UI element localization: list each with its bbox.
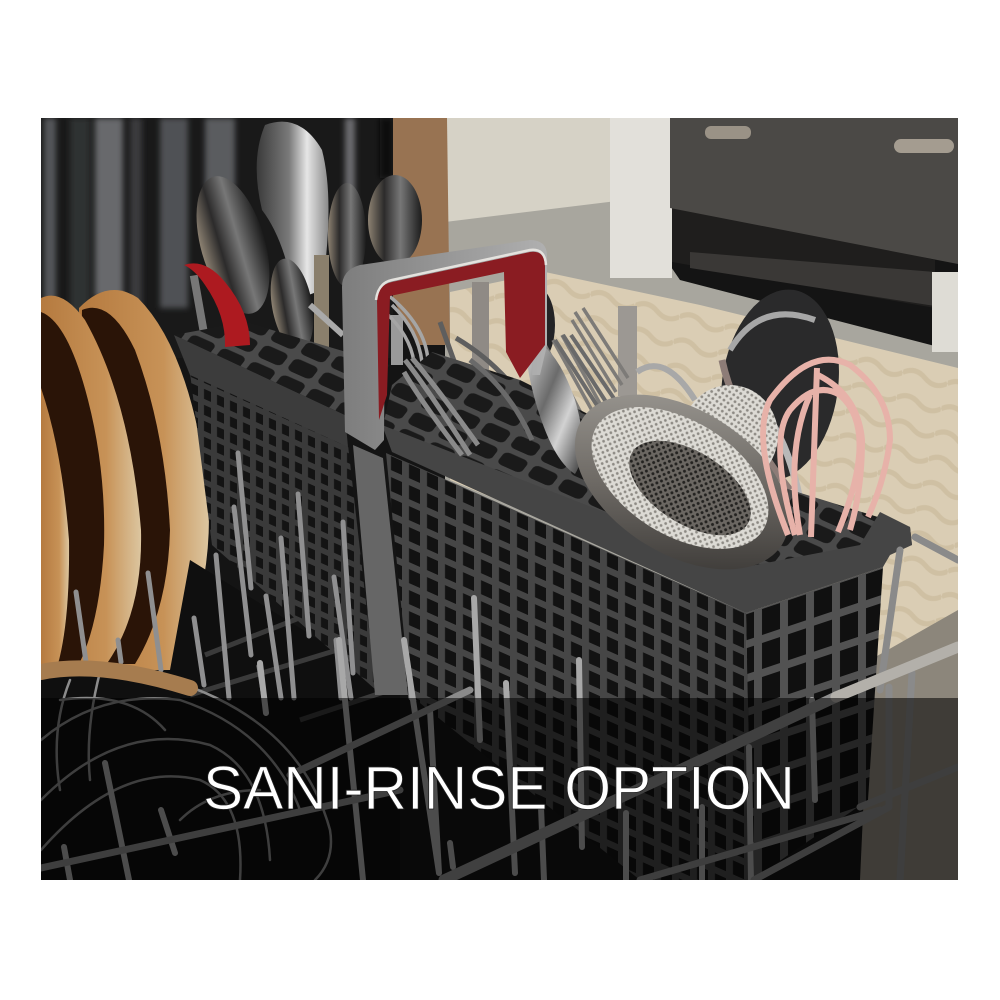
rack rods left bbox=[76, 453, 416, 698]
plate: back bbox=[79, 290, 209, 672]
strainer cup bbox=[691, 385, 778, 464]
right compartment utensils bbox=[385, 282, 851, 500]
rack rods under caption bbox=[64, 598, 815, 880]
handle frame bbox=[342, 240, 547, 450]
dishwasher interior wall bbox=[41, 118, 360, 312]
lower rack front bbox=[41, 537, 958, 880]
caption band bbox=[41, 698, 958, 880]
red utensil handle bbox=[184, 263, 250, 347]
glass bowl foot bbox=[41, 668, 190, 688]
right basket rim bbox=[382, 425, 912, 613]
left basket body bbox=[190, 373, 376, 690]
handle red grip bbox=[377, 252, 545, 420]
kitchen background bbox=[176, 118, 958, 880]
glass bowl bbox=[41, 672, 331, 880]
strainer bbox=[575, 363, 789, 569]
rack wires bbox=[41, 537, 958, 880]
pink whisk bbox=[763, 360, 890, 537]
left basket rim face bbox=[174, 335, 348, 447]
tall utensils left compartment bbox=[183, 122, 422, 360]
strainer rim bbox=[575, 394, 789, 569]
right basket top with holes bbox=[384, 352, 912, 566]
photo: dishwasher rack and silverware basket bbox=[41, 118, 958, 880]
right basket left face bbox=[386, 453, 752, 880]
plates bbox=[41, 290, 209, 672]
spoon and forks over holes bbox=[404, 335, 615, 474]
plate: middle bbox=[41, 296, 141, 662]
handle white edge bbox=[376, 250, 546, 300]
main diagonal rail bbox=[444, 697, 836, 880]
infographic: dishwasher photo with caption bbox=[41, 118, 958, 880]
cabinet handle bbox=[705, 126, 751, 139]
cabinet handle bbox=[894, 139, 954, 153]
lower rack left bbox=[154, 560, 408, 722]
basket handle bbox=[342, 240, 547, 695]
strainer handle bbox=[637, 366, 695, 400]
right basket right face bbox=[746, 567, 883, 880]
plate: front bbox=[41, 388, 69, 664]
handle stem bbox=[353, 445, 408, 695]
left basket top holes bbox=[181, 329, 344, 410]
wooden post bbox=[393, 118, 450, 345]
caption: Sani-Rinse Option: SANI-RINSE OPTION bbox=[203, 754, 795, 822]
